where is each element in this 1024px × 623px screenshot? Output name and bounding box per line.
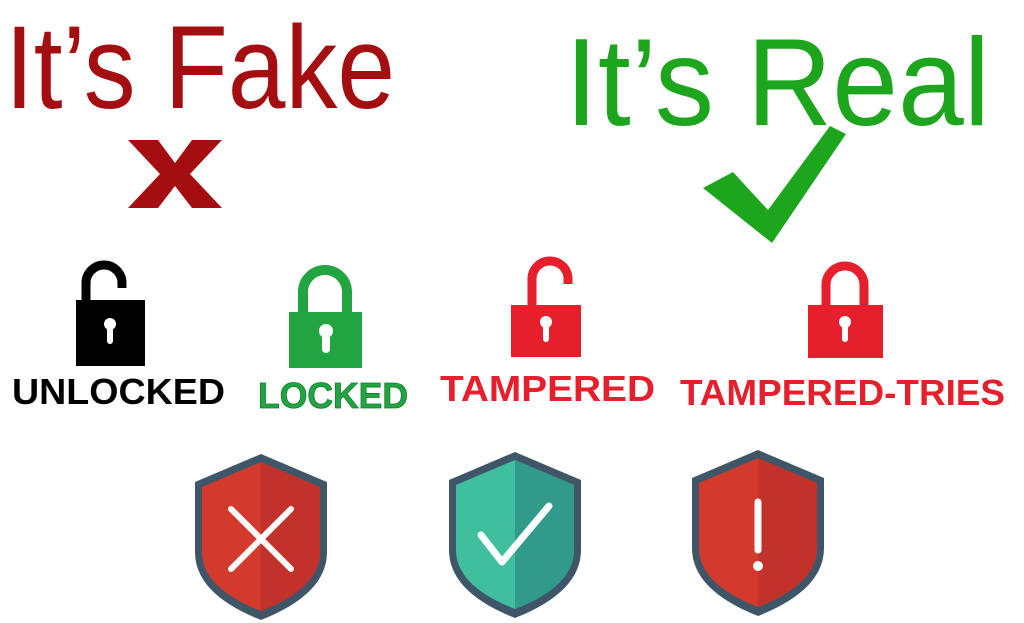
shield: real check: [449, 452, 581, 618]
icon: fake cross: [128, 140, 222, 208]
label: TAMPERED-TRIES: TAMPERED-TRIES: [680, 372, 1005, 413]
label: TAMPERED: TAMPERED: [440, 368, 655, 409]
label: LOCKED: LOCKED: [258, 375, 408, 416]
icon: real check: [703, 126, 846, 243]
shield: warning: [692, 450, 824, 616]
shield: fake x: [195, 454, 327, 620]
title: It's Real: It’s Real: [565, 14, 990, 152]
lock: locked: [289, 270, 362, 368]
title: It's Fake: It’s Fake: [5, 2, 395, 134]
lock: tampered: [511, 261, 581, 357]
label: UNLOCKED: UNLOCKED: [12, 371, 225, 412]
lock: unlocked: [76, 265, 145, 366]
lock: tampered-tries: [808, 266, 883, 358]
